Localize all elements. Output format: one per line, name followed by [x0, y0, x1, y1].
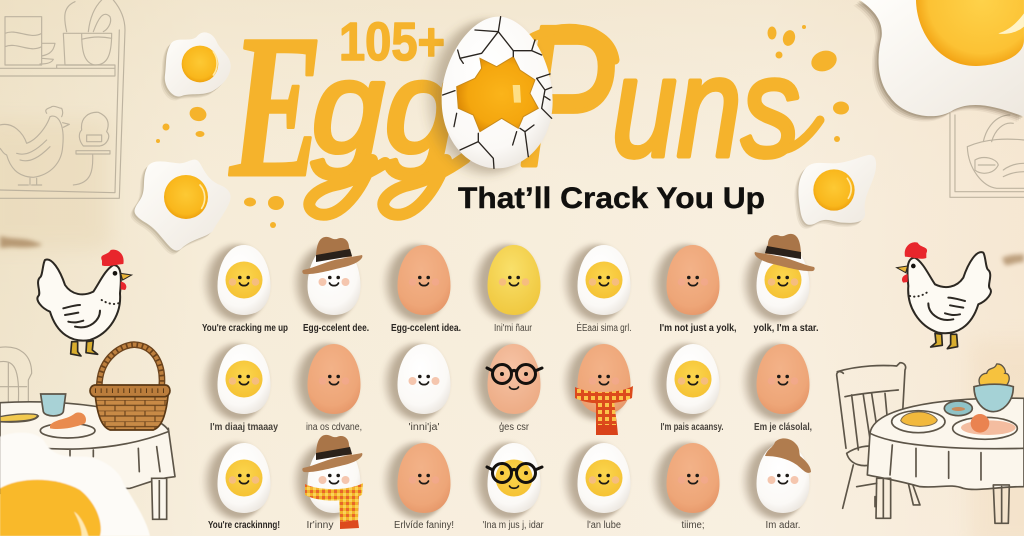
captions, row 1: Egg-ccelent idea. — [391, 323, 461, 334]
yellow splatter dots — [156, 25, 849, 228]
egg: white row 2 — [381, 341, 450, 423]
captions, row 1: I'm not just a yolk, — [660, 323, 737, 334]
egg: white with tilted hat — [740, 438, 811, 522]
salad bowl — [979, 364, 1009, 387]
captions, row 3: l'an lube — [587, 520, 621, 531]
fried egg right — [794, 155, 876, 229]
captions, row 2: Em je clásolal, — [754, 422, 812, 433]
egg grid, row 3 — [201, 435, 811, 529]
right table scene — [837, 363, 1024, 523]
captions, row 3: Erlvíde faniny! — [394, 520, 454, 531]
table leg — [152, 478, 167, 519]
captions, row 3: tiime; — [682, 520, 704, 531]
captions, row 2: ina os cdvane, — [306, 422, 362, 433]
sketch: framed basket — [950, 113, 1024, 197]
captions, row 3: 'Ina m jus j, idar — [482, 520, 544, 531]
fried egg large bottom left — [0, 433, 150, 536]
cracked egg — [423, 17, 553, 178]
captions, row 1: ĖEaai sima grl. — [576, 321, 632, 334]
egg: yolk face row 3 — [201, 440, 270, 522]
captions, row 3: Im adar. — [766, 520, 800, 531]
captions, row 2: I'm pais acaansy. — [660, 422, 724, 433]
egg: brown row 3 right — [650, 440, 720, 522]
egg: white with brown hat — [291, 237, 362, 324]
hen right — [897, 242, 991, 349]
egg: yolk face — [201, 242, 270, 324]
chair — [837, 363, 920, 508]
captions, row 2 — [210, 420, 812, 433]
small bowl — [944, 401, 972, 416]
captions, row 2: I'm diaaj tmaaay — [210, 422, 278, 433]
torn paper mark left — [0, 236, 42, 248]
title: script word Egg Puns: g — [312, 34, 384, 180]
egg: yolk face 2 — [561, 242, 630, 324]
captions, row 1: yolk, I'm a star. — [754, 323, 819, 334]
egg: pink with glasses — [471, 341, 542, 423]
captions, row 2: 'inni'ja' — [408, 422, 440, 433]
egg: yellow — [471, 242, 540, 324]
captions, row 3 — [208, 520, 800, 531]
egg: yolk with brown hat — [740, 234, 815, 324]
egg: brown row 2 right — [740, 341, 810, 423]
title: script word Egg Puns: g — [385, 34, 457, 180]
sketch chair — [0, 347, 32, 403]
captions, row 1: Ini'mi ñaur — [494, 323, 533, 334]
left table scene — [0, 347, 175, 519]
plate with sausage — [40, 423, 95, 438]
egg: brown — [381, 242, 450, 324]
torn paper mark right — [1002, 254, 1024, 265]
plate with toast — [0, 414, 37, 422]
egg: brown 2 — [650, 242, 720, 324]
egg: brown row 2 — [291, 341, 360, 423]
egg: brown with red scarf — [561, 341, 633, 435]
title: 105+: 105+ — [339, 12, 445, 72]
captions, row 1: You're cracking me up — [202, 323, 288, 334]
egg: yolk face row 3 right — [561, 440, 630, 522]
egg: yolk face row 2 — [201, 341, 270, 423]
egg: white with hat and scarf — [291, 435, 363, 529]
plate with pastry — [892, 411, 945, 433]
subtitle: That’ll Crack You Up — [458, 182, 765, 215]
title: script word Egg Puns — [228, 0, 820, 219]
egg: brown row 3 — [381, 440, 450, 522]
hen left — [37, 250, 132, 356]
egg: yolk with glasses — [471, 440, 542, 522]
tablecloth — [867, 398, 1024, 489]
cup — [41, 394, 66, 416]
egg grid, row 2 — [201, 341, 810, 435]
plate with meat — [953, 417, 1017, 439]
captions, row 3: Ir'inny — [306, 520, 334, 531]
captions, row 3: You're crackinnng! — [208, 520, 280, 531]
basket — [90, 345, 170, 430]
egg: yolk face row 2 right — [650, 341, 720, 423]
captions, row 2: ģes csr — [499, 420, 530, 433]
fried egg small top — [161, 32, 231, 101]
egg grid, row 1 — [201, 234, 815, 324]
table legs — [876, 478, 1009, 523]
tablecloth — [0, 402, 175, 493]
title: script word Egg Puns: uns — [612, 27, 800, 187]
captions, row 1: Egg-ccelent dee. — [303, 323, 369, 334]
fried egg left — [131, 160, 231, 255]
fried egg large top right — [853, 0, 1024, 122]
sketch: kitchen shelf with hen — [0, 0, 125, 198]
captions, row 1 — [202, 321, 819, 334]
